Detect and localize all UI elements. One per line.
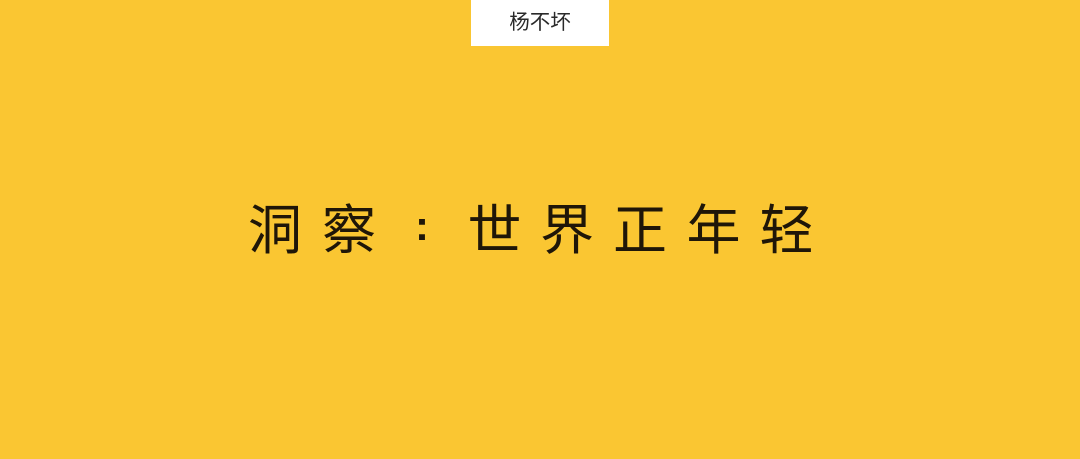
title: 察 [322, 201, 376, 261]
title: 洞 [248, 201, 302, 261]
title: 正 [613, 201, 667, 261]
author tag [471, 0, 609, 46]
title: 年 [686, 201, 740, 261]
title: 界 [540, 201, 594, 261]
title [248, 201, 814, 261]
title: 世 [468, 201, 522, 261]
title: : [415, 202, 429, 249]
title: 轻 [760, 201, 814, 261]
author tag: 杨不坏 [509, 11, 571, 34]
